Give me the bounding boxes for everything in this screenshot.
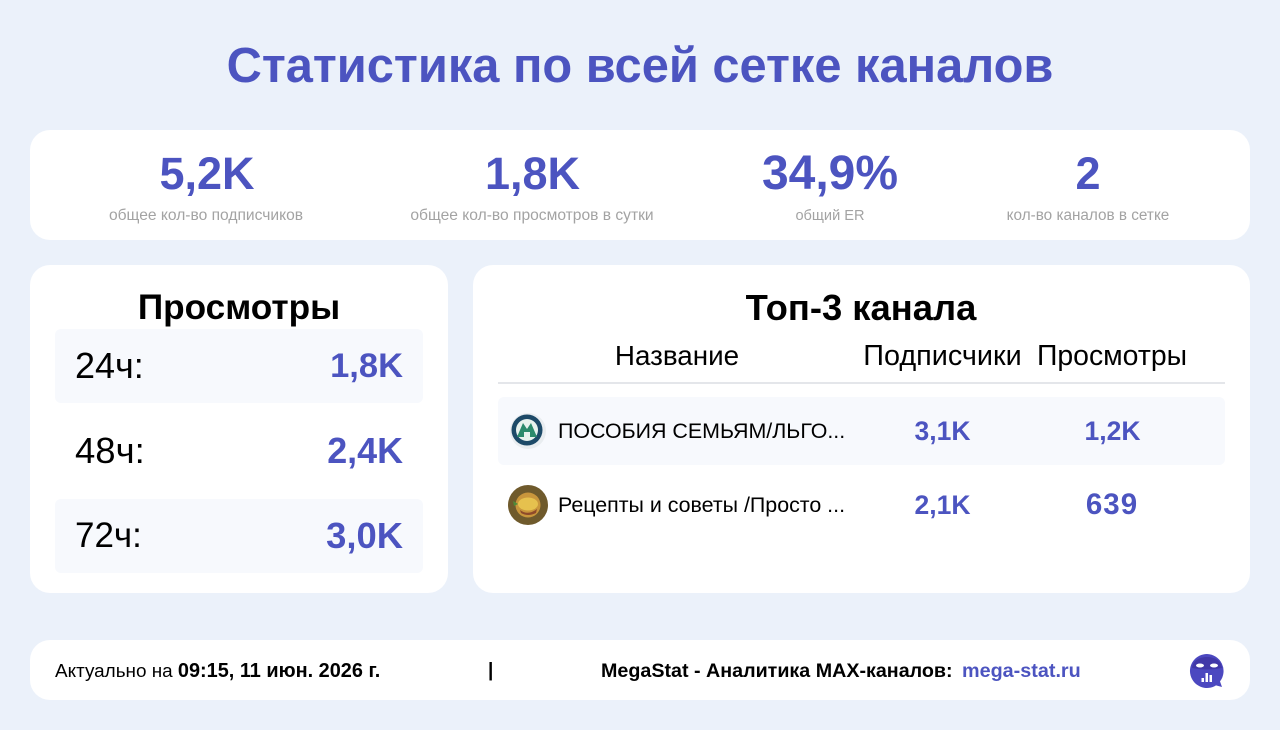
icon: MegaStat logo — [1190, 654, 1224, 688]
stat: subscribers: 5,2K — [159, 148, 255, 199]
stat: ER: 34,9% — [762, 147, 898, 200]
row: 24h: 1,8K — [330, 347, 403, 385]
panel: views — [30, 265, 448, 593]
panel: footer — [30, 640, 1250, 700]
stat: views per day — [410, 148, 654, 224]
icon: channel 1 avatar — [510, 413, 546, 449]
heading: top 3: Топ-3 канала — [746, 287, 976, 328]
table row: channel 1: 1,2K — [1085, 416, 1140, 446]
stat: channel count: кол-во каналов в сетке — [1007, 207, 1169, 224]
table header: Просмотры — [1037, 340, 1187, 372]
stat: ER: общий ER — [795, 208, 865, 224]
footer separator: | — [488, 660, 493, 681]
title: Статистика по всей сетке каналов — [227, 39, 1053, 93]
table header: Название — [615, 340, 739, 371]
table row: channel 2: Рецепты и советы /Просто ... — [558, 493, 845, 517]
row: 48h — [55, 414, 423, 488]
footer link: mega-stat.ru — [962, 660, 1081, 682]
table header — [498, 341, 1225, 384]
stat: views per day: общее кол-во просмотров в сутки — [410, 207, 654, 224]
panel: top 3 channels — [473, 265, 1250, 593]
row: 72h — [55, 499, 423, 573]
table header: Подписчики — [863, 340, 1022, 372]
table row: channel 2 — [508, 485, 1138, 525]
stat: channel count: 2 — [1075, 148, 1101, 199]
stat: channel count — [1007, 148, 1169, 224]
table row: channel 1: 3,1K — [915, 416, 970, 446]
footer brand: MegaStat - Аналитика MAX-каналов: — [601, 660, 953, 682]
table row: channel 1: ПОСОБИЯ СЕМЬЯМ/ЛЬГО... — [558, 419, 845, 443]
icon: channel 2 avatar — [508, 485, 548, 525]
footer date: Актуально на 09:15, 11 июн. 2026 г. — [55, 660, 380, 682]
heading: views: Просмотры — [138, 288, 340, 327]
row: 72h: 72ч: — [75, 516, 142, 555]
stat: views per day: 1,8K — [485, 148, 580, 199]
row: 48h: 2,4K — [327, 431, 403, 471]
table row: channel 2: 639 — [1086, 488, 1138, 521]
panel: summary stats — [30, 130, 1250, 240]
stat: subscribers: общее кол-во подписчиков — [109, 207, 303, 224]
row: 72h: 3,0K — [326, 515, 403, 556]
table row: channel 2: 2,1K — [915, 490, 970, 520]
row: 48h: 48ч: — [75, 430, 145, 471]
row: 24h — [55, 329, 423, 403]
row: 24h: 24ч: — [75, 345, 144, 386]
stat: ER — [762, 147, 898, 224]
table row: channel 1 — [498, 397, 1225, 465]
stat: subscribers — [109, 148, 303, 224]
